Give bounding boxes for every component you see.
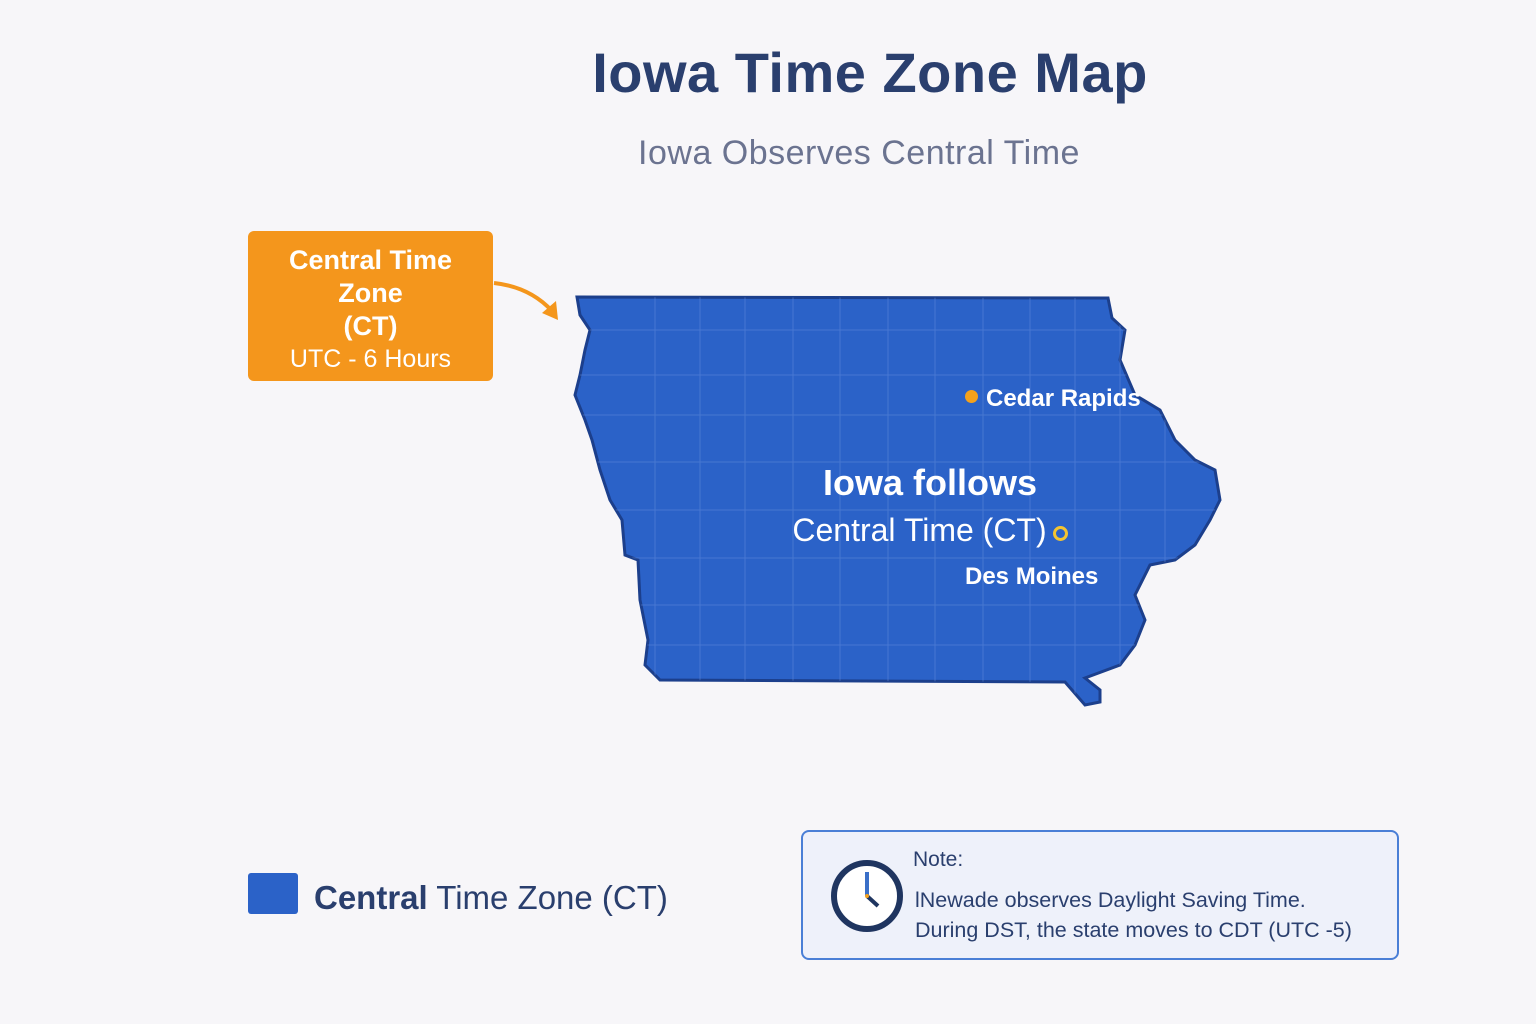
map: Iowa bbox=[573, 296, 1222, 707]
city: Cedar Rapids: Cedar Rapids bbox=[986, 385, 1141, 412]
note box: lNewade observes Daylight Saving Time. bbox=[915, 888, 1306, 912]
callout: central time zone: (CT) bbox=[344, 311, 397, 341]
map label: Iowa follows bbox=[823, 462, 1037, 503]
arrow: callout to map bbox=[494, 281, 558, 320]
city: Des Moines: Des Moines bbox=[965, 563, 1098, 590]
title: Iowa Time Zone Map bbox=[592, 41, 1148, 104]
map label: Central Time (CT) bbox=[792, 512, 1047, 548]
callout: central time zone: Central Time bbox=[289, 245, 452, 275]
subtitle: Iowa Observes Central Time bbox=[638, 134, 1080, 172]
callout: central time zone bbox=[248, 231, 493, 381]
callout: central time zone: UTC - 6 Hours bbox=[290, 345, 451, 373]
icon: clock bbox=[831, 860, 903, 932]
note box: Note: bbox=[913, 848, 963, 871]
legend: Central Time Zone (CT) bbox=[314, 879, 668, 916]
note box bbox=[801, 830, 1399, 960]
callout: central time zone: Zone bbox=[338, 278, 403, 308]
map label bbox=[792, 462, 1068, 548]
note box: During DST, the state moves to CDT (UTC -5) bbox=[915, 918, 1352, 942]
